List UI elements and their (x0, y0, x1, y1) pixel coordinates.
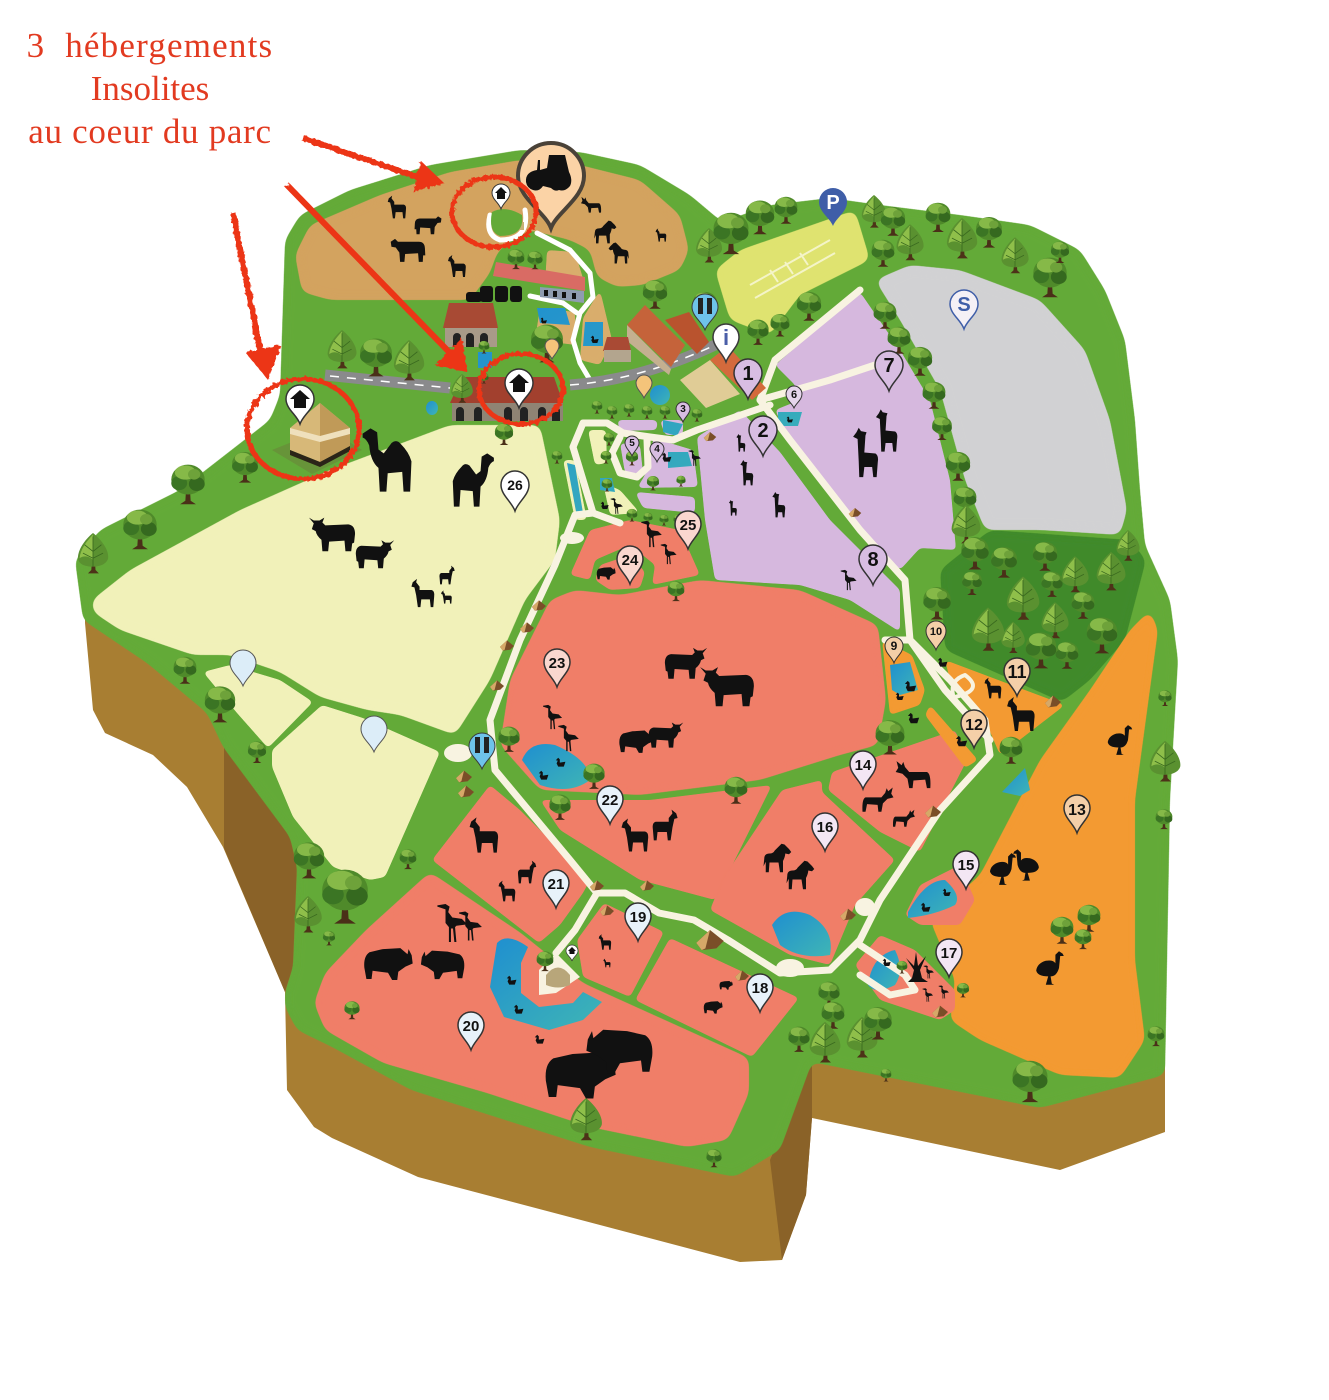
pin: house markers (286, 184, 578, 961)
plazas (444, 532, 875, 995)
panel: orange zone 13 (930, 610, 1158, 1078)
panel: purple zone 2 (697, 410, 900, 632)
cabins (492, 216, 524, 230)
pin 4: 4 (654, 444, 660, 455)
pin: services (230, 143, 978, 769)
pin 9 (885, 637, 903, 663)
pin 23: 23 (549, 655, 565, 672)
pin 13 (1064, 795, 1090, 833)
pin 22: 22 (602, 792, 618, 809)
pin 12: 12 (965, 717, 983, 734)
pin 22 (597, 786, 623, 824)
pin 24: 24 (622, 552, 639, 569)
panel: zone 18 (635, 938, 799, 1057)
panel: cream small (203, 665, 313, 748)
pin 12 (961, 710, 987, 748)
pin 21: 21 (548, 876, 564, 893)
pin: S (950, 290, 978, 329)
pin: numbered markers (458, 351, 1090, 1050)
building: coop (540, 287, 584, 303)
panel: zone 19 (577, 903, 664, 997)
pin 5 (625, 436, 639, 456)
building: barn centre (450, 377, 563, 421)
title: 3 hébergements (27, 26, 273, 65)
pin 14: 14 (855, 757, 872, 774)
panel: zone 25 (570, 520, 700, 585)
pin 18 (747, 974, 773, 1012)
title: au coeur du parc (28, 112, 272, 151)
waterfowl silhouettes (507, 318, 951, 1044)
pin 8: 8 (867, 549, 879, 571)
pin 16: 16 (817, 819, 833, 836)
pin: blank west (230, 650, 256, 686)
pin: info (713, 324, 739, 362)
tent lodge (272, 403, 362, 474)
pin 1: 1 (742, 363, 754, 385)
panel: cream pockets in centre (563, 430, 640, 520)
pin: restaurant east (636, 375, 652, 398)
panel: zone 21 (432, 785, 590, 943)
pin 21 (543, 870, 569, 908)
building: long shed (493, 262, 585, 291)
panel: purple zone 7 (775, 292, 956, 570)
pin 25 (675, 511, 701, 549)
building: small stable (603, 337, 631, 362)
road (325, 345, 715, 388)
building: barn left (443, 303, 498, 347)
pin 25: 25 (680, 517, 696, 534)
house pin yurt (566, 945, 578, 961)
trees (78, 195, 1180, 1167)
pin 6 (786, 386, 802, 408)
pin 10 (926, 621, 946, 650)
pin 19: 19 (630, 909, 646, 926)
animal silhouettes: salmon zones (364, 521, 930, 1099)
annotation: red circles (247, 177, 563, 479)
panel: grey area S (875, 265, 1127, 535)
pin 16 (812, 813, 838, 851)
house pin lodge 3 (492, 184, 510, 209)
panel: zone 20 (314, 872, 749, 1147)
pin 2: 2 (757, 420, 769, 442)
pin 1 (734, 359, 762, 399)
building: reception (665, 312, 766, 400)
pin 4 (650, 442, 664, 462)
panel: purple small zones (617, 420, 698, 513)
pin: restaurant north (545, 339, 559, 359)
pin: parking: P (826, 192, 840, 214)
pin 5: 5 (629, 438, 635, 449)
pin: S: S (957, 294, 971, 316)
pin: info: i (723, 325, 729, 350)
pin 8 (859, 545, 887, 585)
building: orange farmhouse (627, 305, 685, 375)
pin 9: 9 (891, 639, 898, 653)
patch of lawn (491, 209, 522, 236)
pin 26: 26 (507, 477, 523, 493)
pin 13: 13 (1068, 802, 1086, 819)
pin 6: 6 (791, 389, 797, 401)
pin 15: 15 (958, 857, 974, 874)
house pin lodge 1 (286, 385, 314, 424)
lakes (426, 308, 1030, 1030)
pin 24 (617, 546, 643, 584)
pin 18: 18 (752, 980, 768, 997)
title (27, 26, 273, 151)
huts (456, 432, 1061, 1017)
panel: cream zone 26 (92, 425, 560, 735)
pin 15 (953, 851, 979, 889)
panel: zone 17 (855, 935, 955, 1020)
pin 20 (458, 1012, 484, 1050)
tractors (466, 286, 522, 302)
panel: pens near farm (535, 250, 612, 365)
panel: orange zone 12 (925, 705, 978, 768)
pin 19 (625, 903, 651, 941)
panel: salmon main zone 23 (500, 580, 886, 795)
parking lines (750, 240, 835, 298)
panel: farm field (295, 160, 689, 300)
panel: orange zone 9 (882, 640, 925, 715)
panel: orange zone 11 (945, 660, 1065, 755)
pin 3: 3 (680, 404, 686, 415)
animal silhouettes: llamas (729, 409, 897, 517)
pin 23 (544, 649, 570, 687)
house pin lodge 2 (505, 369, 533, 408)
pin 11: 11 (1007, 662, 1027, 682)
panel: zone 15 (905, 865, 975, 925)
pin 17: 17 (941, 945, 957, 962)
animal silhouettes: farm (388, 196, 666, 277)
panel: zone 14 (828, 730, 967, 852)
pin: tractor (518, 143, 584, 228)
buildings (272, 209, 766, 987)
pin: blank south-west (361, 716, 387, 752)
panel: parking (715, 210, 870, 335)
pin: toilets top (692, 294, 718, 330)
pin: toilets south (469, 733, 495, 769)
yurt lodge (546, 968, 570, 988)
paths (489, 210, 990, 995)
pin: parking (819, 188, 847, 226)
island base (85, 610, 1165, 1262)
yard (680, 360, 740, 408)
island green surface (75, 150, 1178, 1177)
animal silhouettes: emus and kangaroos (896, 658, 1132, 1002)
pin 14 (850, 751, 876, 789)
pin 26 (501, 471, 529, 511)
panel: cream small 2 (272, 705, 440, 880)
pin 17 (936, 939, 962, 977)
arrow: to top lodge (303, 138, 444, 192)
dead tree (906, 952, 928, 982)
pin 7 (875, 351, 903, 391)
panel: forest (940, 530, 1146, 702)
pin 7: 7 (883, 355, 895, 377)
pin 20: 20 (463, 1018, 479, 1035)
pin 3 (676, 402, 690, 422)
panel: zone 22 (540, 785, 772, 900)
pin 2 (749, 416, 777, 456)
arrow: to centre lodge (287, 185, 467, 372)
panel: zone 16 (710, 780, 895, 965)
arrow: to tent lodge (233, 213, 281, 380)
title: Insolites (91, 69, 209, 108)
pin 11 (1004, 658, 1030, 696)
animal silhouettes: camels and cattle (309, 428, 616, 607)
panel: zone 24 (595, 555, 645, 590)
pin 10: 10 (930, 626, 942, 638)
